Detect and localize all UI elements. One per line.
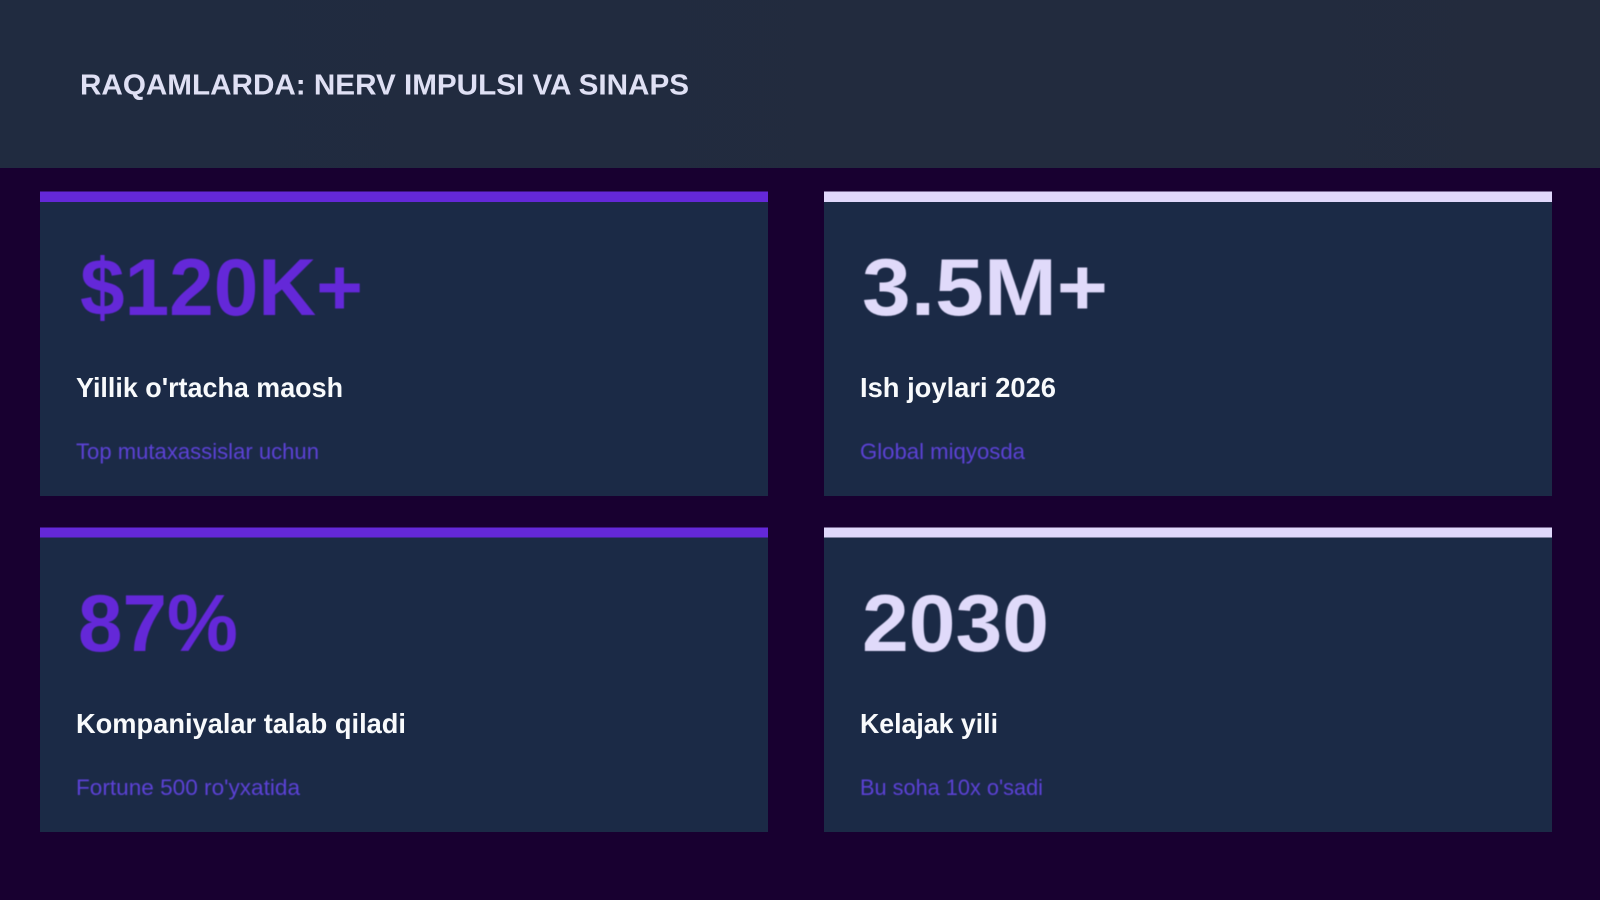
panel: salary stat <box>40 192 768 496</box>
stat label: Kelajak yili <box>860 708 998 739</box>
stat note: Top mutaxassislar uchun <box>76 439 319 464</box>
stat label: Ish joylari 2026 <box>860 372 1056 403</box>
stat value: 3.5M+ <box>862 243 1108 333</box>
stat note: Fortune 500 ro'yxatida <box>76 775 301 800</box>
stat note: Bu soha 10x o'sadi <box>860 775 1043 800</box>
stat label: Yillik o'rtacha maosh <box>76 372 343 403</box>
title: RAQAMLARDA: NERV IMPULSI VA SINAPS <box>80 70 689 102</box>
stat note: Global miqyosda <box>860 439 1026 464</box>
stat value: 2030 <box>862 579 1049 669</box>
header band <box>0 0 1600 168</box>
panel: future year stat <box>824 528 1552 832</box>
stat value: 87% <box>78 579 238 669</box>
panel: companies stat <box>40 528 768 832</box>
stat value: $120K+ <box>80 243 363 333</box>
stat label: Kompaniyalar talab qiladi <box>76 708 406 739</box>
panel: jobs stat <box>824 192 1552 496</box>
